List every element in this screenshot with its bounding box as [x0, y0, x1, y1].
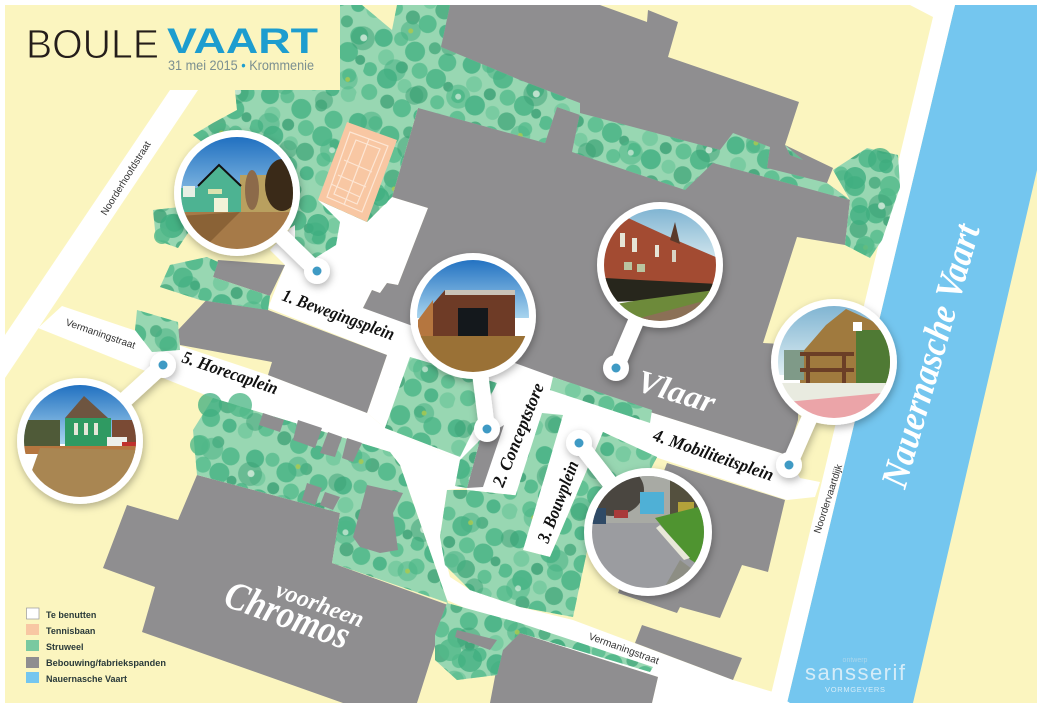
label: 1. Bewegingsplein: 1. Bewegingsplein	[280, 285, 397, 344]
pin and photo: 3. Bouwplein	[566, 430, 712, 596]
logo: sansserif: VORMGEVERS	[825, 685, 885, 694]
buildings: fabriekspanden	[103, 5, 850, 703]
title panel	[5, 5, 340, 90]
struweel: green areas with trees	[135, 5, 900, 680]
legend: Tennisbaan	[46, 626, 95, 636]
street label: Vermaningstraat west: Vermaningstraat	[64, 317, 137, 352]
title panel: 31 mei 2015 • Krommenie	[168, 57, 314, 73]
street label: Noordervaartdijk: Noordervaartdijk	[812, 462, 845, 535]
street label: Noorderhoofdstraat: Noorderhoofdstraat	[99, 139, 154, 218]
label: 4. Mobiliteitsplein: 4. Mobiliteitsplein	[650, 425, 776, 485]
label: 2. Conceptstore: 2. Conceptstore	[488, 380, 548, 490]
pin and photo: 5. Horecaplein	[17, 352, 176, 504]
pin and photo: 2. Conceptstore	[410, 253, 536, 442]
legend: Struweel	[46, 642, 84, 652]
street label: Vermaningstraat east: Vermaningstraat	[587, 631, 660, 667]
logo: sansserif	[805, 657, 906, 694]
label: 3. Bouwplein: 3. Bouwplein	[533, 458, 583, 546]
label: Vlaar: Vlaar	[633, 362, 721, 420]
logo: sansserif: sansserif	[805, 660, 906, 685]
pin and photo: Vlaar	[597, 202, 723, 381]
title panel: VAART	[167, 22, 318, 61]
legend: Nauernasche Vaart	[46, 674, 127, 684]
road: Noordervaartdijk	[768, 5, 955, 703]
label: 5. Horecaplein: 5. Horecaplein	[180, 347, 281, 398]
label: voorheen: voorheen	[272, 577, 367, 633]
small buildings in the struweel	[259, 413, 497, 650]
label: Chromos: Chromos	[219, 571, 356, 658]
title panel: BOULE	[26, 21, 159, 67]
water: Nauernasche Vaart	[787, 5, 1037, 703]
pin and photo: 4. Mobiliteitsplein	[771, 299, 897, 478]
label: Nauernasche Vaart: Nauernasche Vaart	[873, 218, 989, 493]
road: Vermaningstraat	[38, 306, 790, 703]
tennisbaan	[318, 122, 397, 222]
legend: Te benutten	[46, 610, 96, 620]
legend: Bebouwing/fabriekspanden	[46, 658, 166, 668]
te benutten: pleinen	[241, 107, 820, 557]
legend	[26, 608, 166, 684]
logo: sansserif: ontwerp	[843, 657, 868, 664]
pin and photo: 1. Bewegingsplein	[174, 130, 330, 284]
road: Noorderhoofdstraat	[5, 90, 198, 378]
